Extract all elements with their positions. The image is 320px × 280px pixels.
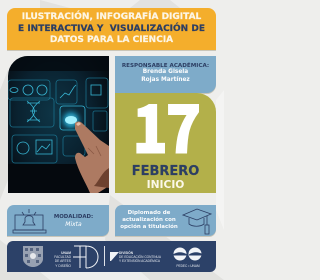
- text: division de educacion continua: Y EXTENSIÓN ACADÉMICA: [119, 258, 160, 262]
- value: mixta: Mixta: [65, 220, 82, 228]
- diploma text: [120, 210, 178, 230]
- icon: laptop with bell: [12, 209, 46, 234]
- diploma text: opción a titulación: [120, 224, 178, 230]
- start label: INICIO: [147, 178, 184, 190]
- background marble texture: [0, 0, 224, 280]
- photo: hand touching futuristic science interface: [8, 56, 109, 193]
- day number: 17: [132, 76, 199, 173]
- panel: modality: [7, 205, 109, 236]
- month: FEBRERO: [132, 164, 199, 178]
- text: facultad de artes y diseño: FACULTAD: [54, 255, 71, 259]
- text: facultad de artes y diseño: UNAM: [61, 251, 71, 255]
- planet glow: [60, 108, 82, 132]
- footer: institutional logos: [7, 241, 216, 272]
- text: division de educacion continua: [119, 250, 161, 262]
- label: modalidad: MODALIDAD:: [54, 214, 93, 220]
- title line 3: DATOS PARA LA CIENCIA: [50, 35, 173, 45]
- hand: [75, 122, 109, 193]
- label: responsable: RESPONSABLE ACADÉMICA:: [122, 62, 209, 68]
- panel: diploma: [115, 205, 216, 236]
- panel: academic lead: [115, 56, 216, 93]
- icon: graduation cap: [182, 208, 212, 234]
- diploma text: Diplomado de: [128, 210, 170, 216]
- panel: date: [115, 93, 216, 193]
- text: facultad de artes y diseño: DE ARTES: [55, 259, 71, 263]
- title line 2: E INTERACTIVA Y VISUALIZACIÓN DE: [18, 24, 205, 34]
- title banner: [7, 8, 216, 50]
- text: division de educacion continua: DIVISIÓN: [119, 250, 133, 254]
- text: division de educacion continua: DE EDUCACIÓN CONTINUA: [119, 254, 161, 258]
- logo: division triangle: [110, 252, 119, 261]
- text: pedec unam: PEDEC • UNAM: [176, 264, 200, 268]
- logo: PEDEC UNAM: [174, 248, 202, 260]
- title line 1: ILUSTRACIÓN, INFOGRAFÍA DIGITAL: [22, 12, 201, 22]
- diploma text: actualización con: [122, 216, 176, 222]
- name: Brenda Gisela: [143, 69, 188, 75]
- name: [141, 68, 190, 83]
- divider: [104, 246, 105, 266]
- text: facultad de artes y diseño: Y DISEÑO: [55, 264, 71, 268]
- logo: UNAM crest: [23, 246, 43, 267]
- text: facultad de artes y diseño: [54, 251, 71, 268]
- logo: FAD: [73, 246, 98, 268]
- name: Rojas Martínez: [141, 77, 190, 83]
